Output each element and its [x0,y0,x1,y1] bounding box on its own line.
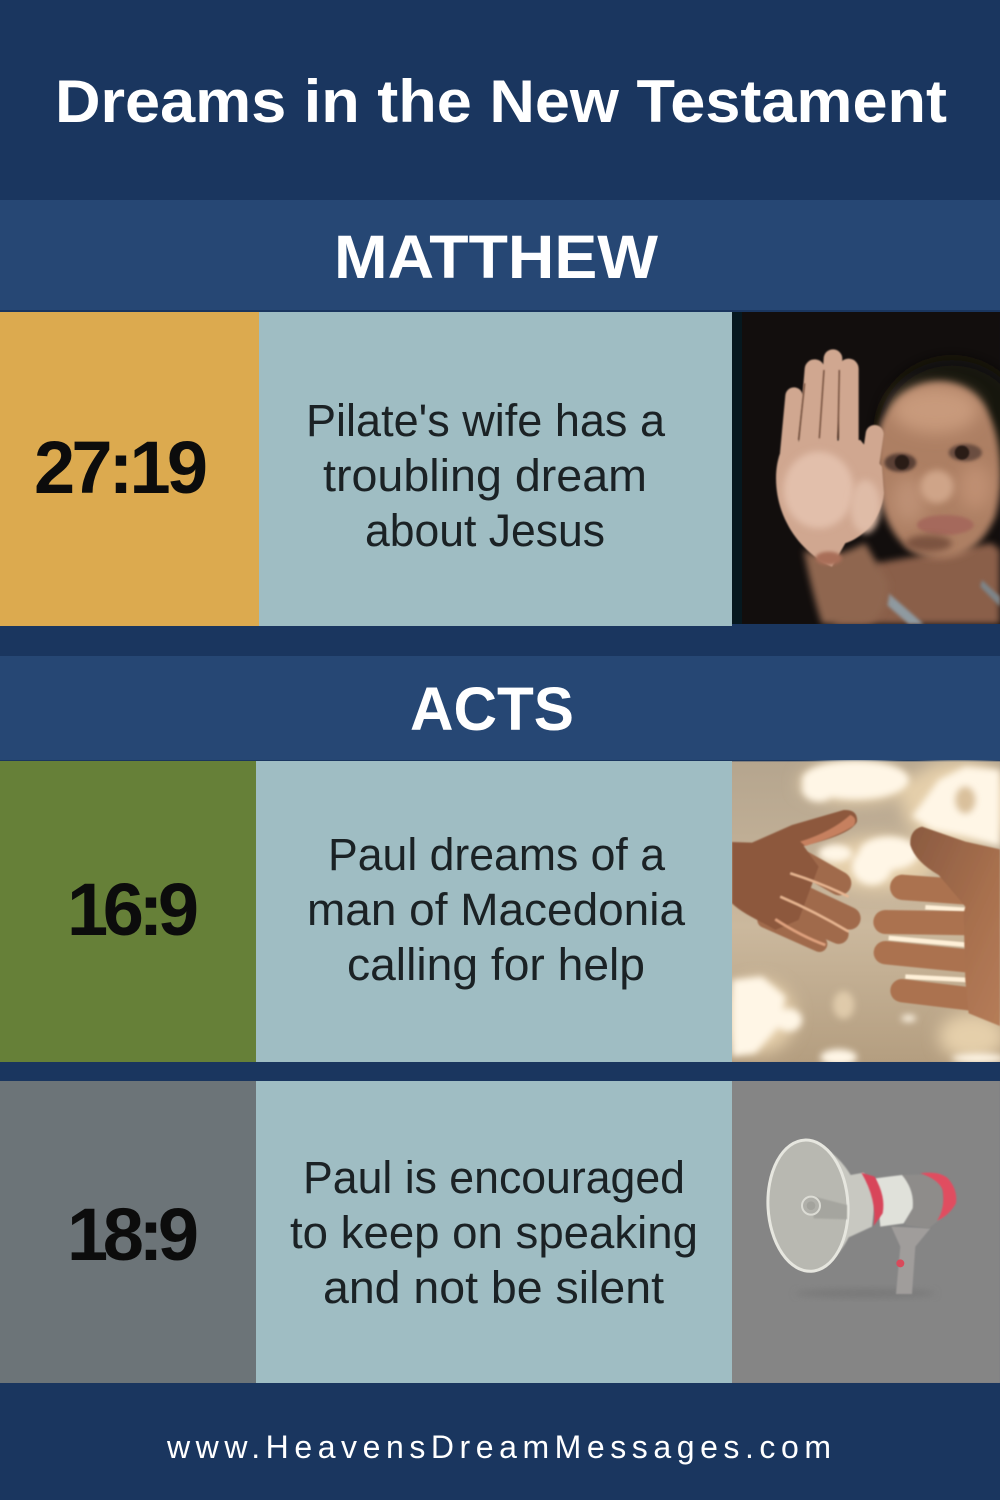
rear red band [920,1173,956,1221]
clouds [722,760,1000,1060]
text panel: Pilate's wife: troubling dream [323,450,647,501]
left hand [732,810,857,945]
verse box: 16:9: 16:9 [67,868,199,951]
heading band: Acts: ACTS [410,675,574,743]
eyes [884,453,916,472]
palm and fingers [776,359,884,567]
text panel: Pilate's wife: Pilate's wife has a [306,395,666,446]
row: Matthew 27:19 [0,312,1000,626]
photo: megaphone [732,1081,1000,1383]
row: Acts 16:9 [0,760,1000,1065]
heading band: Matthew: MATTHEW [334,223,658,291]
text panel: Paul dreams: Paul dreams of a [328,829,666,880]
text panel: Pilate's wife: about Jesus [365,505,605,556]
text panel: Pilate's wife [259,312,732,626]
verse box: 18:9: 18:9 [67,1193,199,1276]
verse box: 27:19 [0,312,260,626]
front red band [861,1173,883,1226]
text panel: Paul dreams [256,761,732,1062]
verse box: 18:9 [0,1081,257,1383]
hair [906,366,1000,389]
neck and chest [832,543,1000,624]
text panel: Paul dreams: calling for help [347,939,645,990]
horn bell [831,1152,874,1254]
verse box: 27:19: 27:19 [34,426,208,509]
text panel: Paul is encouraged: and not be silent [323,1262,665,1313]
heading band: Matthew [0,200,1000,310]
gap highlights between right-hand fingers [889,907,967,980]
white body [875,1175,913,1227]
text panel: Paul is encouraged [256,1081,732,1383]
driver [812,1196,847,1219]
heading band: Acts [0,656,1000,760]
text panel: Paul is encouraged: to keep on speaking [290,1207,698,1258]
face [877,382,1000,558]
photo: woman raising her hand [732,312,1000,624]
photo: two hands reaching in clouds [722,760,1000,1065]
verse box: 16:9 [0,761,257,1062]
forearm [804,543,889,624]
horn mouth [765,1138,851,1273]
mouth [917,515,974,535]
row: Acts 18:9 [0,1081,1000,1383]
floor shadow [818,1290,901,1296]
title: Dreams in the New Testament [55,68,947,135]
nose [920,470,954,503]
right hand [885,827,1000,1026]
palm highlights and creases [784,452,854,528]
handle [891,1227,930,1294]
text panel: Paul dreams: man of Macedonia [307,884,686,935]
footer URL: www.HeavensDreamMessages.com [166,1429,831,1465]
rear body [904,1176,942,1227]
text panel: Paul is encouraged: Paul is encouraged [303,1152,685,1203]
